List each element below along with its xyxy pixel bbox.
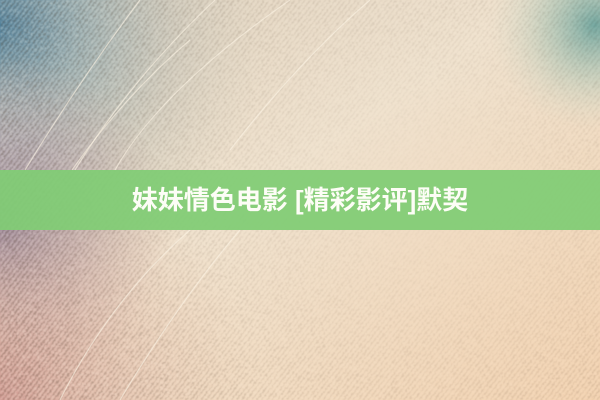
title: 妹妹情色电影 [精彩影评]默契 (132, 185, 468, 215)
banner (0, 170, 600, 230)
